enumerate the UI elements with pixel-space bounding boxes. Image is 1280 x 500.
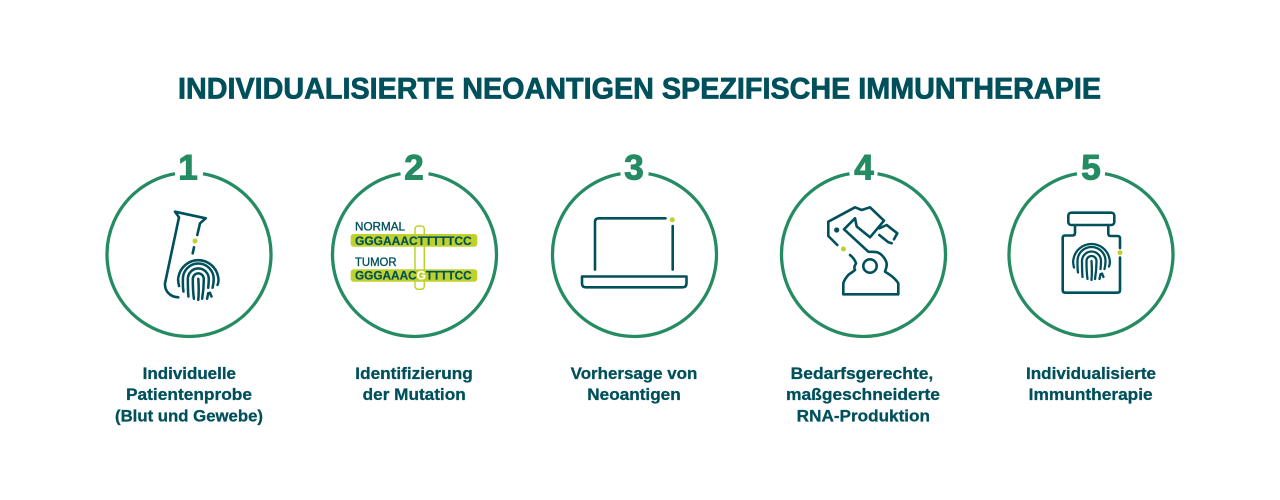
label 3 xyxy=(571,364,697,404)
label 5: Immuntherapie xyxy=(1029,385,1153,404)
label 2 xyxy=(355,364,473,404)
label 1: Patientenprobe xyxy=(126,385,252,404)
icon: laptop xyxy=(582,217,686,287)
icon: DNA sequence comparison xyxy=(351,220,477,289)
label 4: RNA-Produktion xyxy=(797,407,930,426)
title: INDIVIDUALISIERTE NEOANTIGEN SPEZIFISCHE IMMUNTHERAPIE xyxy=(178,72,1101,105)
label 5: Individualisierte xyxy=(1026,364,1156,383)
number 1: 1 xyxy=(178,148,198,188)
ring 3 xyxy=(552,174,716,336)
ring 1 xyxy=(107,174,271,336)
label 1 xyxy=(115,364,263,426)
panel: step 1 xyxy=(107,148,271,426)
icon: flask with fingerprint xyxy=(165,212,218,300)
icon: DNA sequence comparison: GGGAAACTTTTTCC xyxy=(355,234,472,248)
label 3: Neoantigen xyxy=(587,385,681,404)
label 2: Identifizierung xyxy=(355,364,473,383)
panel: step 4 xyxy=(781,148,945,426)
label 4: Bedarfsgerechte, xyxy=(791,364,933,383)
label 4 xyxy=(786,364,940,426)
label 4: maßgeschneiderte xyxy=(786,385,940,404)
number 4: 4 xyxy=(854,148,874,188)
ring 2 xyxy=(333,174,497,336)
label 3: Vorhersage von xyxy=(571,364,697,383)
number 5: 5 xyxy=(1081,148,1101,188)
icon: DNA sequence comparison: TUMOR xyxy=(355,255,397,269)
icon: jar with fingerprint xyxy=(1063,213,1122,293)
label 1: Individuelle xyxy=(143,364,236,383)
icon: DNA sequence comparison: GGGAAACGTTTTCC xyxy=(355,268,472,282)
icon: robot arm xyxy=(828,207,898,294)
ring 5 xyxy=(1009,174,1173,336)
ring 4 xyxy=(781,174,945,336)
number 3: 3 xyxy=(624,148,644,188)
number 2: 2 xyxy=(404,148,424,188)
label 2: der Mutation xyxy=(363,385,466,404)
label 1: (Blut und Gewebe) xyxy=(115,407,263,426)
panel: step 2 xyxy=(333,148,497,404)
panel: step 5 xyxy=(1009,148,1173,404)
icon: DNA sequence comparison: NORMAL xyxy=(355,220,405,234)
label 5 xyxy=(1026,364,1156,404)
panel: step 3 xyxy=(552,148,716,404)
